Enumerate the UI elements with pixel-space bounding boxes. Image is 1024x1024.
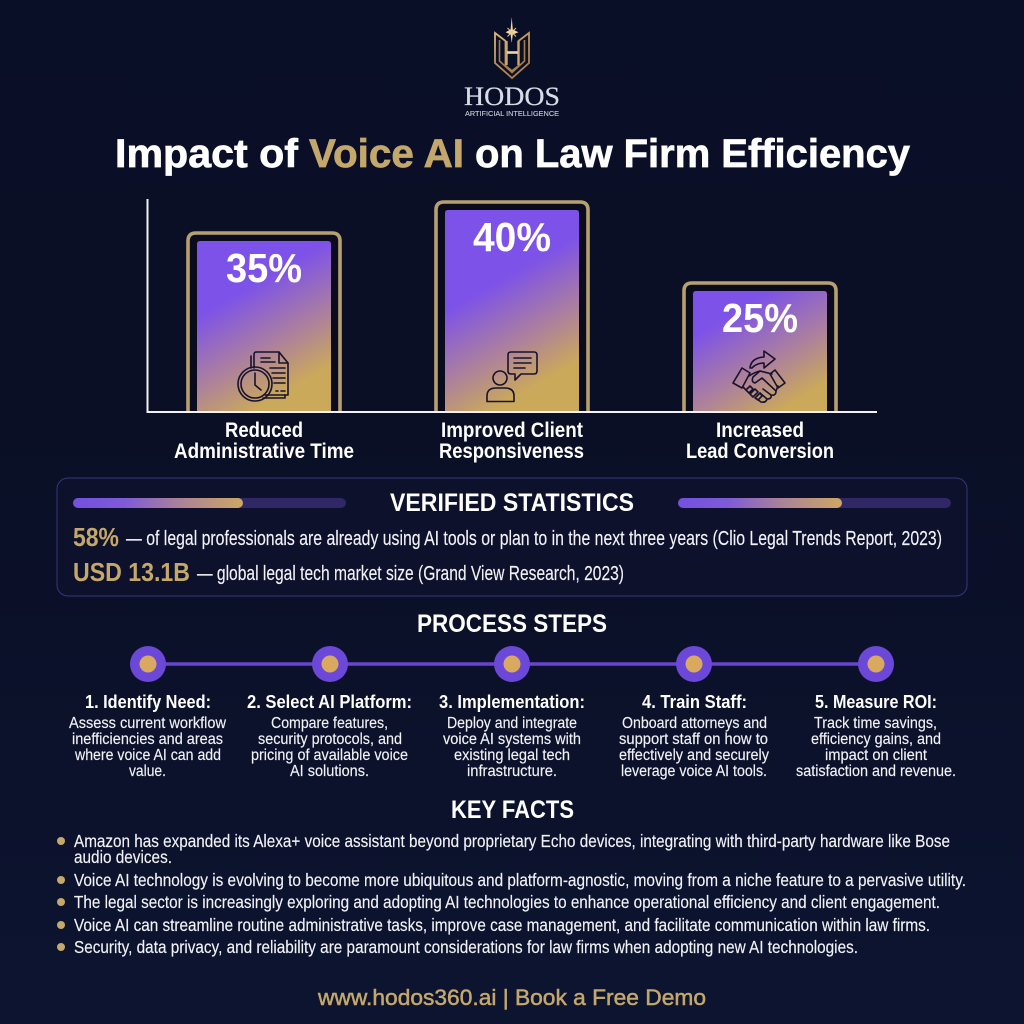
step 5: efficiency gains, and: [811, 731, 941, 748]
icon: document and clock: [238, 352, 288, 401]
brand tagline: ARTIFICIAL INTELLIGENCE: [465, 109, 559, 118]
step 1: Assess current workflow: [69, 715, 226, 732]
statistic: USD 13.1B: USD 13.1B: [73, 557, 190, 587]
bar: increased lead conversion 25%: [684, 283, 836, 463]
title: [115, 132, 911, 176]
fact 1: audio devices.: [74, 847, 172, 867]
title: Voice AI: [309, 132, 464, 176]
step 3: Deploy and integrate: [447, 715, 577, 732]
step 2: pricing of available voice: [251, 747, 408, 764]
logo: [464, 17, 560, 118]
progress bar left: [73, 498, 346, 508]
label: Increased: [716, 419, 804, 442]
bar chart: [148, 199, 877, 463]
value: 25%: [722, 295, 798, 341]
bar: improved client responsiveness 40%: [436, 202, 588, 463]
step 4: support staff on how to: [619, 731, 768, 748]
step 3: infrastructure.: [467, 763, 557, 780]
heading: key facts: KEY FACTS: [451, 796, 574, 824]
heading: VERIFIED STATISTICS: [390, 489, 634, 517]
brand name: HODOS: [464, 82, 560, 111]
bar: increased lead conversion 25%: Lead Conversion: [686, 440, 834, 463]
step 4: Onboard attorneys and: [622, 715, 767, 732]
statistic: 58%: [73, 522, 942, 552]
heading: process steps: PROCESS STEPS: [417, 610, 607, 638]
step 5: 5. Measure ROI:: [815, 691, 937, 712]
icon: shield monogram with star: [495, 17, 529, 78]
progress bar right: [678, 498, 951, 508]
step 3: 3. Implementation:: [439, 691, 585, 712]
step 3: [439, 691, 585, 780]
step 5: impact on client: [825, 747, 928, 764]
step 2: 2. Select AI Platform:: [247, 691, 412, 712]
step 5: [796, 691, 956, 780]
statistic: USD 13.1B: [73, 557, 624, 587]
value: 35%: [226, 245, 302, 291]
bar: reduced administrative time 35%: [174, 233, 354, 463]
step 2: AI solutions.: [290, 763, 369, 780]
title: on Law Firm Efficiency: [475, 132, 911, 176]
fact 5: Security, data privacy, and reliability are paramount considerations for law firms when adopting new AI technologies.: [74, 937, 858, 957]
step 5: satisfaction and revenue.: [796, 763, 956, 780]
axes: [148, 199, 877, 412]
step 3: existing legal tech: [454, 747, 570, 764]
step 4: effectively and securely: [619, 747, 769, 764]
statistic: USD 13.1B: — global legal tech market size (Grand View Research, 2023): [197, 563, 624, 585]
fact 4: Voice AI can streamline routine administrative tasks, improve case management, and facilitate communication within law firms.: [74, 915, 930, 935]
step 1: inefficiencies and areas: [72, 731, 223, 748]
step 2: Compare features,: [271, 715, 388, 732]
step 1: where voice AI can add: [74, 747, 221, 764]
step 3: voice AI systems with: [443, 731, 581, 748]
label: Improved Client: [441, 419, 583, 442]
label: Reduced: [225, 419, 303, 442]
step 2: security protocols, and: [258, 731, 402, 748]
step 1: [69, 691, 226, 780]
footer call to action: www.hodos360.ai | Book a Free Demo: [317, 985, 706, 1010]
step 1: value.: [129, 763, 166, 780]
step 4: 4. Train Staff:: [642, 691, 747, 712]
step 2: [247, 691, 412, 780]
step 5: Track time savings,: [814, 715, 937, 732]
icon: person with speech bubble: [487, 352, 537, 402]
process timeline: [130, 646, 894, 682]
value: 40%: [473, 214, 551, 260]
step 1: 1. Identify Need:: [85, 691, 211, 712]
bar: improved client responsiveness 40%: Responsiveness: [439, 440, 584, 463]
step 4: [619, 691, 769, 780]
fact 1: [57, 831, 950, 867]
title: Impact of: [115, 132, 299, 176]
bar: reduced administrative time 35%: Administrative Time: [174, 440, 354, 463]
step 4: leverage voice AI tools.: [621, 763, 767, 780]
panel: verified statistics: [57, 478, 967, 596]
key facts list: [57, 831, 966, 957]
statistic: 58%: 58%: [73, 522, 119, 552]
icon: handshake with arrow: [733, 351, 785, 402]
